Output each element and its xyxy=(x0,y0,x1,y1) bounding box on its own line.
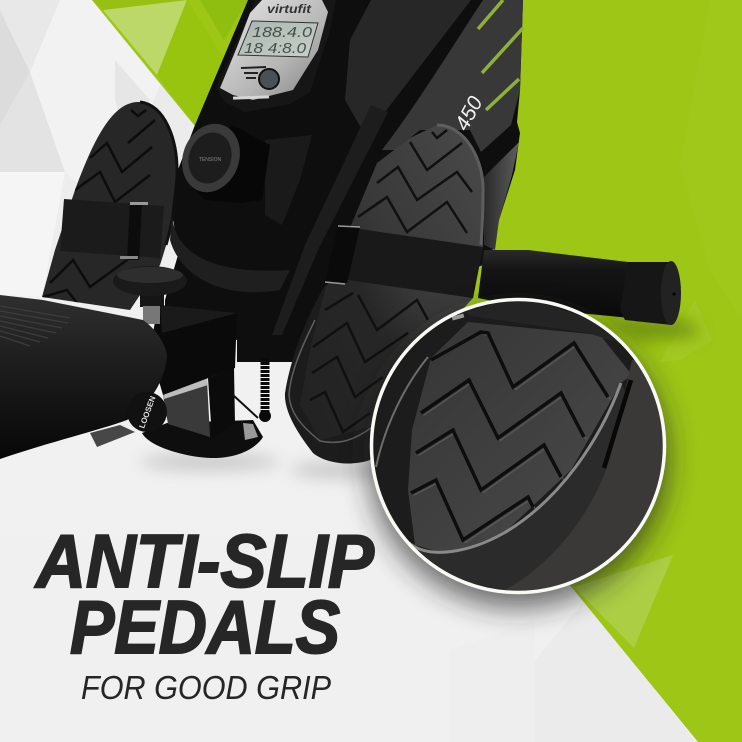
seat adjustment knob xyxy=(113,266,187,324)
magnified rim xyxy=(409,383,621,552)
axle end cap xyxy=(620,262,678,325)
console button xyxy=(259,69,279,89)
magnified bowl xyxy=(418,386,625,590)
pedal buckle xyxy=(325,226,360,284)
rear housing box xyxy=(484,142,519,250)
pedal rim highlight xyxy=(289,320,372,442)
model number: 450 xyxy=(451,92,488,134)
magnified pad xyxy=(408,322,632,555)
post front xyxy=(163,380,210,437)
lower body curve xyxy=(170,215,290,292)
body recess xyxy=(265,135,312,225)
magnified side panel xyxy=(506,360,663,590)
LCD screen xyxy=(238,21,318,57)
floor shadows xyxy=(140,315,700,478)
brand label: virtufit xyxy=(267,2,312,16)
left pedal strap xyxy=(60,199,164,258)
post side xyxy=(208,368,235,438)
base plate xyxy=(142,420,263,458)
LCD readout: 188.4.0 xyxy=(252,24,313,41)
front pedal with strap and axle xyxy=(285,125,681,464)
left pedal chevron tread xyxy=(43,110,155,307)
post light edge xyxy=(163,378,208,399)
LCD readout: 18 4:8.0 xyxy=(244,40,307,57)
pedal bowl xyxy=(285,285,420,464)
grey tab xyxy=(90,425,135,447)
magnified slit xyxy=(604,380,631,468)
headline xyxy=(34,519,375,669)
silver console panel xyxy=(220,0,328,100)
coiled cable xyxy=(233,358,271,422)
seat xyxy=(0,295,167,459)
resistance knob xyxy=(173,116,270,203)
axle tube xyxy=(478,250,681,325)
magnified tread highlight xyxy=(414,334,610,542)
seat post and base xyxy=(90,358,271,458)
base plate highlight xyxy=(243,423,258,440)
rear pedal with strap xyxy=(42,102,177,310)
LCD readout xyxy=(244,24,313,57)
left pedal footplate xyxy=(42,102,177,310)
body grey side panel xyxy=(382,0,523,152)
pedal footplate xyxy=(300,125,483,440)
loosen label: LOOSEN xyxy=(137,395,158,430)
console xyxy=(216,0,336,112)
magnifier ring xyxy=(372,300,664,592)
magnified pedal detail xyxy=(370,296,680,600)
loosen label xyxy=(127,392,167,432)
seat ribbing xyxy=(0,306,70,346)
bracket xyxy=(150,305,237,395)
magnified strap xyxy=(593,334,602,338)
subheading: FOR GOOD GRIP xyxy=(81,669,331,706)
rower main body xyxy=(165,0,523,362)
magnifier contents xyxy=(374,301,663,591)
magnifier shadow xyxy=(368,308,668,608)
knob label: TENSION xyxy=(199,157,221,163)
body upper grey panel xyxy=(345,0,471,145)
magnified tread xyxy=(411,332,608,540)
pedal chevron tread xyxy=(310,130,472,432)
pedal strap xyxy=(347,229,483,298)
body diagonal band xyxy=(272,105,388,335)
headline line 1: ANTI-SLIP xyxy=(34,519,375,603)
green accent stripes xyxy=(478,0,523,110)
headline line 2: PEDALS xyxy=(70,585,340,669)
